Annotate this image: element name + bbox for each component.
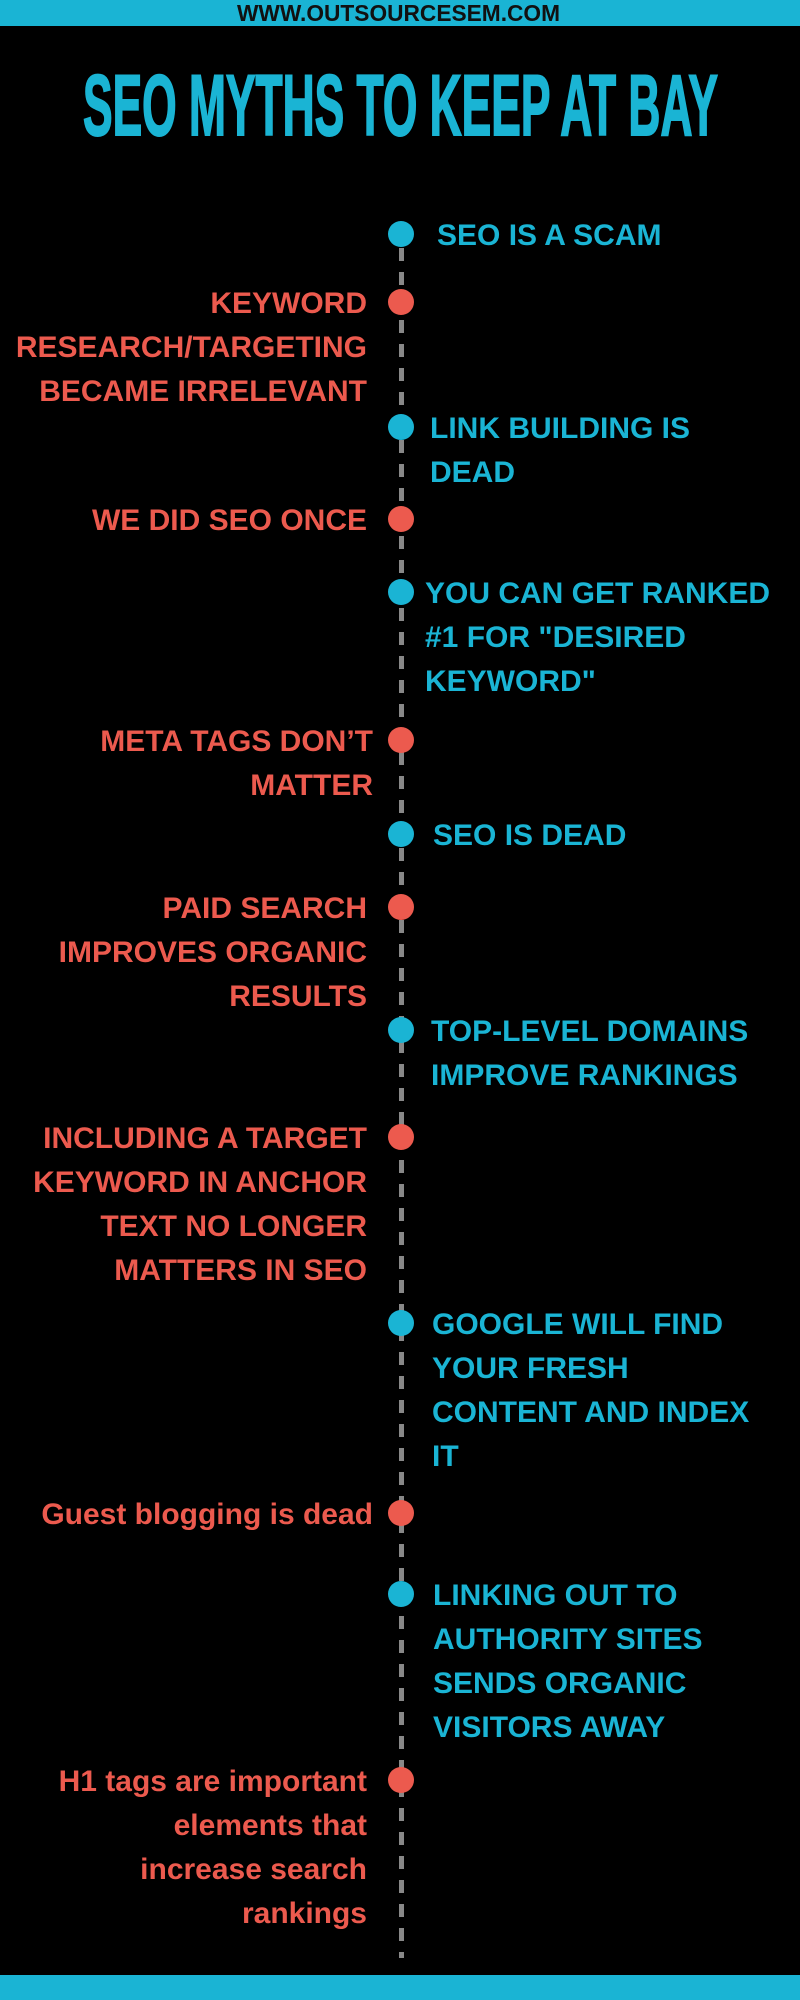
myth 11: YOUR FRESH [432, 1352, 629, 1385]
myth 1: SEO IS A SCAM [437, 219, 661, 252]
myth 13: VISITORS AWAY [433, 1711, 665, 1744]
myth 14: increase search [140, 1853, 367, 1886]
dot 14 [388, 1767, 414, 1793]
website url: WWW.OUTSOURCESEM.COM [237, 0, 560, 26]
myth 13: AUTHORITY SITES [433, 1623, 702, 1656]
myth 6: META TAGS DON’T [100, 725, 373, 758]
timeline line [399, 248, 404, 1958]
dot 8 [388, 894, 414, 920]
dot 2 [388, 289, 414, 315]
dot 3 [388, 414, 414, 440]
myth 5: #1 FOR "DESIRED [425, 621, 686, 654]
myth 9: TOP-LEVEL DOMAINS [431, 1015, 748, 1048]
myth 8 [59, 892, 367, 1013]
myth 8: IMPROVES ORGANIC [59, 936, 367, 969]
dot 7 [388, 821, 414, 847]
myth 2 [16, 287, 367, 408]
dot 1 [388, 221, 414, 247]
myth 13: LINKING OUT TO [433, 1579, 677, 1612]
myth 13: SENDS ORGANIC [433, 1667, 686, 1700]
myth 2: RESEARCH/TARGETING [16, 331, 367, 364]
myth 2: BECAME IRRELEVANT [39, 375, 367, 408]
myth 14: elements that [174, 1809, 367, 1842]
myth 3 [430, 412, 690, 489]
dot 5 [388, 579, 414, 605]
myth 8: PAID SEARCH [163, 892, 367, 925]
dot 4 [388, 506, 414, 532]
myth 6 [100, 725, 373, 802]
myth 14 [59, 1765, 367, 1930]
dot 9 [388, 1017, 414, 1043]
myth 3: LINK BUILDING IS [430, 412, 690, 445]
dot 11 [388, 1310, 414, 1336]
myth 3: DEAD [430, 456, 515, 489]
myth 11 [432, 1308, 749, 1473]
myth 10: KEYWORD IN ANCHOR [33, 1166, 367, 1199]
dot 6 [388, 727, 414, 753]
myth 6: MATTER [250, 769, 373, 802]
myth 10 [33, 1122, 367, 1287]
myth 9 [431, 1015, 748, 1092]
myth 10: MATTERS IN SEO [114, 1254, 367, 1287]
myth 5 [425, 577, 770, 698]
dot 12 [388, 1500, 414, 1526]
dot 10 [388, 1124, 414, 1150]
myth 11: IT [432, 1440, 459, 1473]
myth 5: YOU CAN GET RANKED [425, 577, 770, 610]
myth 8: RESULTS [229, 980, 367, 1013]
myth 5: KEYWORD" [425, 665, 596, 698]
bottom bar [0, 1975, 800, 2000]
myth 4: WE DID SEO ONCE [92, 504, 367, 537]
myth 7: SEO IS DEAD [433, 819, 626, 852]
top bar [0, 0, 800, 26]
myth 10: TEXT NO LONGER [100, 1210, 367, 1243]
myth 9: IMPROVE RANKINGS [431, 1059, 738, 1092]
myth 14: rankings [242, 1897, 367, 1930]
myth 10: INCLUDING A TARGET [43, 1122, 367, 1155]
myth 14: H1 tags are important [59, 1765, 367, 1798]
myth 13 [433, 1579, 702, 1744]
myth 12: Guest blogging is dead [41, 1498, 373, 1531]
dot 13 [388, 1581, 414, 1607]
myth 11: GOOGLE WILL FIND [432, 1308, 723, 1341]
myth 11: CONTENT AND INDEX [432, 1396, 749, 1429]
myth 2: KEYWORD [210, 287, 367, 320]
